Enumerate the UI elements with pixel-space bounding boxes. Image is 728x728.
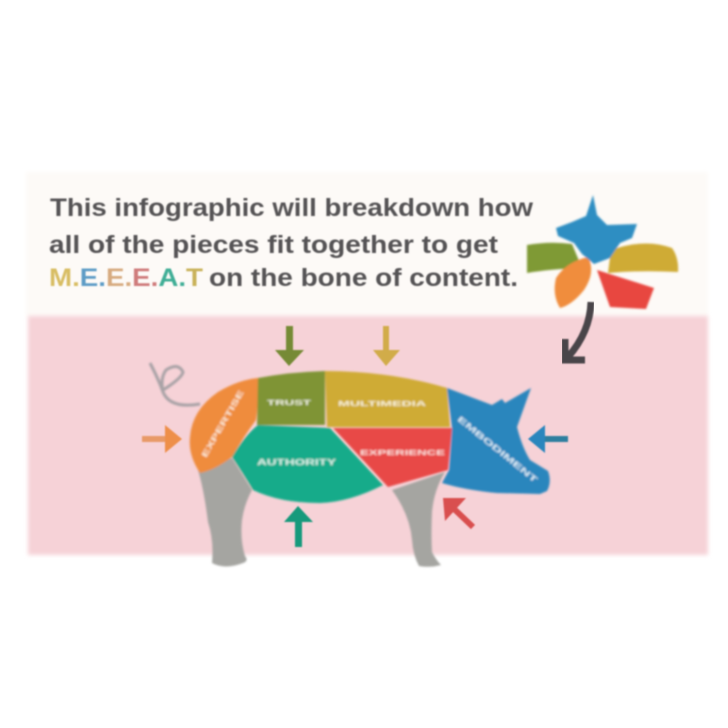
heading text: on the bone of content. [209,264,518,292]
cut: experience [333,428,452,487]
icon: separated pig pieces [527,195,678,309]
arrow: blue [528,425,568,453]
cut: multimedia: MULTIMEDIA [338,399,427,408]
red piece [597,270,654,309]
heading text [49,194,534,292]
blue piece [556,195,637,264]
cut: trust: TRUST [267,398,312,407]
gold piece [608,243,678,273]
tail [150,363,200,405]
heading text: all of the pieces fit together to get [49,231,499,259]
panel: pig background [28,316,708,555]
pig illustration [150,363,550,567]
cut: expertise: EXPERTISE [200,388,246,459]
cut: trust [257,371,325,425]
cut: authority [232,425,383,503]
arrow: orange [142,425,182,453]
rear leg [198,458,252,566]
arrow: gold [373,326,400,366]
cut: experience: EXPERIENCE [360,448,445,457]
cut: authority: AUTHORITY [257,458,337,467]
coloured M.E.E.E.A.T acronym: M.E.E.E.A.T [49,264,203,292]
cut: multimedia [325,371,450,427]
arrow: olive [275,326,304,366]
cut: embodiment head: EMBODIMENT [456,415,539,485]
arrow: green [284,506,313,547]
arrow: red [443,498,473,527]
front leg [392,472,445,567]
orange piece [555,257,591,308]
olive piece [527,243,582,273]
panel: intro [26,172,708,317]
heading text: This infographic will breakdown how [50,194,534,222]
arrow: dark curved pointer [565,302,591,360]
cut: embodiment head [442,388,550,494]
cut: expertise [190,378,258,473]
